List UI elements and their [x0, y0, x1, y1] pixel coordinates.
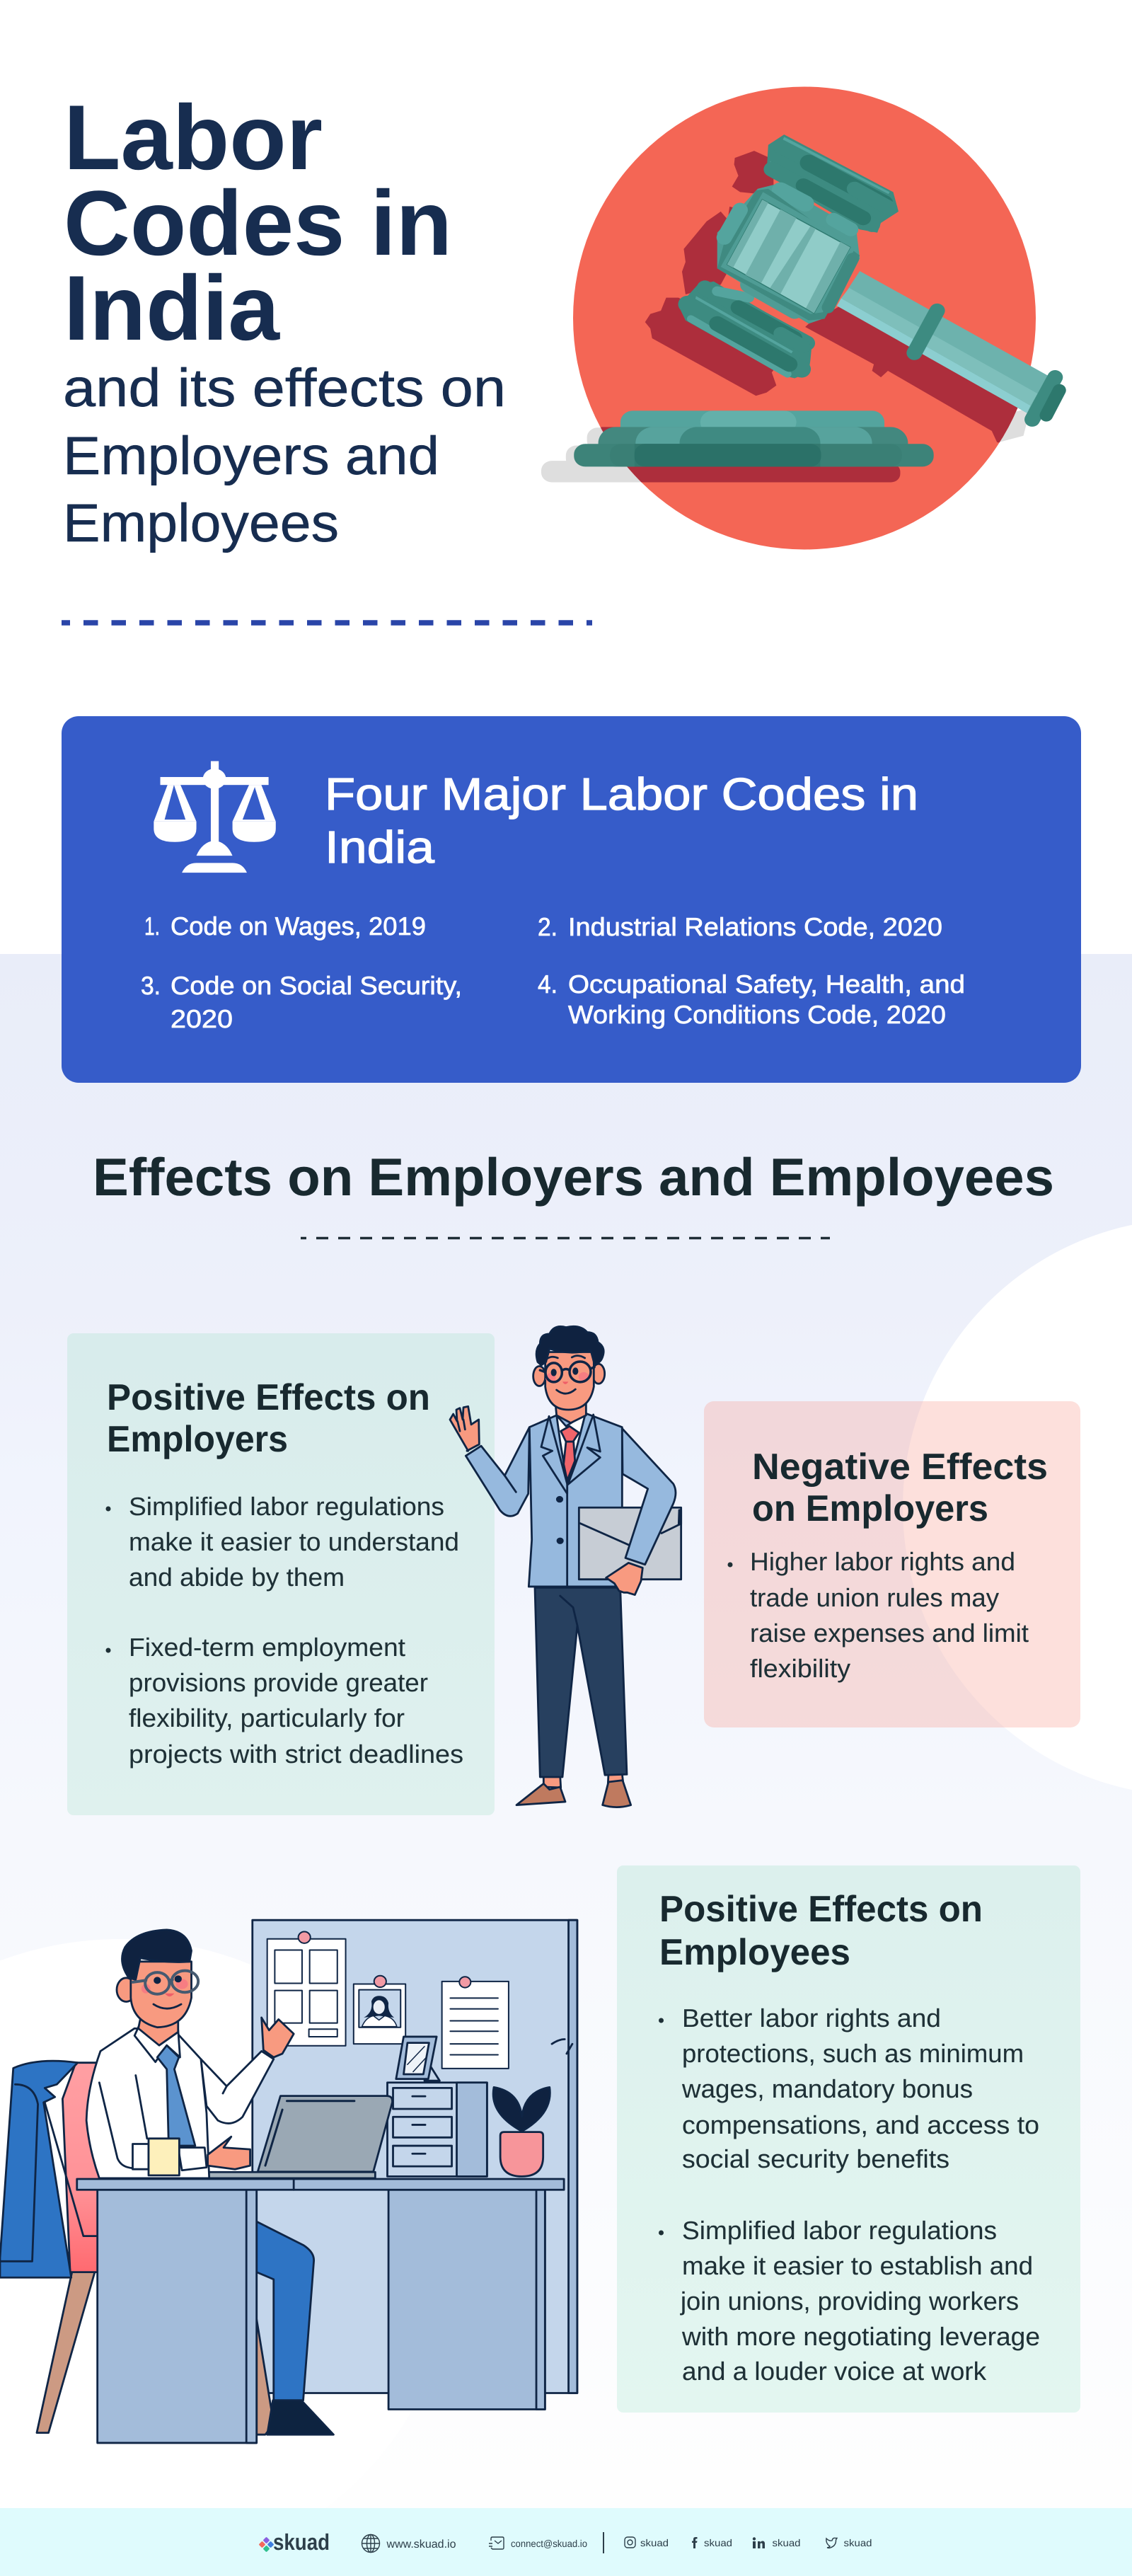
envelope — [579, 1507, 681, 1580]
photo frame — [396, 2037, 439, 2081]
twitter: skuad — [843, 2537, 872, 2548]
bullet: better labor rights: Better labor rights and — [682, 2003, 941, 2032]
grey shadow — [541, 408, 1030, 482]
gavel handle — [837, 271, 1048, 413]
heading — [659, 1889, 983, 1973]
website — [362, 2535, 456, 2552]
bullet: fixed-term employment: flexibility, particularly for — [129, 1703, 405, 1732]
list of codes: 2020 — [171, 1004, 233, 1033]
list of codes: Industrial Relations Code, 2020 — [568, 912, 942, 941]
pinned photo — [354, 1976, 405, 2044]
bullet: better labor rights — [659, 2003, 1039, 2173]
bullet: simplified regulations: make it easier to establish and — [682, 2251, 1033, 2280]
icon: scales of justice — [154, 761, 276, 873]
bullet: simplified regulations: and a louder voice at work — [682, 2357, 987, 2386]
heading: Positive Effects on — [107, 1377, 430, 1418]
list of codes: 1. — [144, 912, 160, 941]
legs and shoes — [516, 1587, 631, 1807]
heading — [107, 1377, 430, 1460]
cubicle wall — [253, 1920, 577, 2393]
bullet: simplified regulations: Simplified labor regulations — [129, 1492, 444, 1521]
head — [117, 1930, 198, 2045]
background panel — [0, 954, 1132, 2576]
footer — [0, 2508, 1132, 2576]
subtitle: and its effects on — [63, 358, 506, 418]
twitter — [826, 2537, 872, 2548]
illustration: gavel on red circle — [541, 86, 1059, 549]
section heading: Effects on Employers and Employees — [93, 1147, 1054, 1207]
glasses and face — [547, 1356, 585, 1359]
sound block — [620, 410, 884, 440]
heading: Employees — [659, 1932, 850, 1973]
heading: Four Major Labor Codes in — [325, 769, 918, 820]
chair — [37, 2063, 99, 2433]
heading: India — [325, 822, 434, 873]
list of codes: 4. — [538, 970, 558, 999]
heading: Employers — [107, 1419, 288, 1460]
linkedin — [753, 2537, 801, 2548]
list of codes: Working Conditions Code, 2020 — [568, 1000, 946, 1029]
laptop — [209, 2096, 393, 2178]
heading — [752, 1447, 1048, 1529]
bullet: simplified regulations: join unions, providing workers — [680, 2287, 1019, 2316]
bullet: better labor rights: social security benefits — [682, 2144, 949, 2173]
shirt and tie — [541, 1414, 600, 1494]
panel: positive effects on employers — [67, 1333, 495, 1815]
heading: Negative Effects — [752, 1447, 1048, 1488]
man torso and arm — [86, 2025, 274, 2178]
list of codes: 2. — [538, 912, 558, 941]
jacket on chair — [0, 2061, 78, 2277]
title — [64, 86, 452, 360]
bullet: simplified regulations: and abide by them — [129, 1563, 345, 1592]
hands — [208, 2018, 294, 2169]
bullet: better labor rights: wages, mandatory bonus — [681, 2074, 973, 2103]
facebook — [692, 2537, 732, 2548]
far leg and shoe — [257, 2221, 333, 2434]
bullet: higher labor rights: Higher labor rights and — [750, 1547, 1015, 1576]
list of codes: 3. — [141, 971, 161, 1000]
jacket — [466, 1413, 622, 1587]
mug and sleeve — [132, 2139, 207, 2175]
head — [533, 1326, 605, 1423]
pinned grid paper — [267, 1931, 346, 2046]
pinned note — [442, 1977, 509, 2069]
title: Labor — [64, 86, 323, 189]
bullet: simplified regulations: with more negotiating leverage — [681, 2322, 1040, 2351]
bullet: higher labor rights: raise expenses and limit — [750, 1618, 1029, 1648]
red circle — [573, 86, 1036, 549]
illustration: standing businessman with envelope — [450, 1326, 681, 1807]
heading: on Employers — [752, 1488, 988, 1529]
right arm and hand — [606, 1429, 676, 1595]
bullet: better labor rights: compensations, and access to — [682, 2110, 1039, 2139]
panel: positive effects on employees — [617, 1865, 1080, 2413]
linkedin: skuad — [773, 2537, 801, 2548]
email: connect@skuad.io — [511, 2538, 587, 2549]
bullet: fixed-term employment: provisions provide greater — [129, 1668, 428, 1697]
instagram: skuad — [640, 2537, 669, 2548]
gavel head — [717, 184, 860, 323]
bullet: simplified regulations — [106, 1492, 459, 1592]
website: www.skuad.io — [386, 2538, 456, 2551]
bullet: better labor rights: protections, such as minimum — [682, 2039, 1024, 2068]
subtitle: Employers and — [63, 426, 439, 486]
illustration: man at office desk — [0, 1920, 577, 2443]
bullet: fixed-term employment: projects with strict deadlines — [129, 1740, 463, 1769]
hair — [536, 1326, 603, 1365]
heading — [325, 769, 918, 873]
bullet: fixed-term employment — [106, 1633, 463, 1769]
bullet: higher labor rights — [727, 1547, 1029, 1683]
facebook: skuad — [704, 2537, 732, 2548]
logo: skuad — [273, 2529, 330, 2555]
list of codes — [141, 912, 965, 1033]
list of codes: Occupational Safety, Health, and — [568, 970, 965, 999]
bullet: simplified regulations: Simplified labor regulations — [682, 2216, 997, 2245]
bullet: higher labor rights: trade union rules may — [750, 1583, 999, 1612]
bullet: simplified regulations: make it easier to understand — [129, 1527, 459, 1556]
subtitle: Employees — [63, 493, 339, 553]
list of codes: Code on Social Security, — [171, 971, 462, 1000]
email — [489, 2537, 587, 2549]
gavel shadow — [601, 151, 1030, 482]
subtitle — [63, 358, 506, 553]
raised hand — [450, 1406, 479, 1451]
list of codes: Code on Wages, 2019 — [171, 912, 426, 941]
bullet: fixed-term employment: Fixed-term employment — [129, 1633, 405, 1662]
instagram — [625, 2537, 669, 2548]
title: India — [64, 256, 281, 360]
bullet: higher labor rights: flexibility — [750, 1654, 850, 1683]
file cabinet — [387, 2083, 487, 2176]
heading: Positive Effects on — [659, 1889, 983, 1930]
panel: four major labor codes — [62, 716, 1081, 1083]
bullet: simplified regulations — [659, 2216, 1040, 2386]
title: Codes in — [64, 171, 452, 275]
plant — [493, 2087, 550, 2176]
desk — [77, 2179, 564, 2443]
panel: negative effects on employers — [704, 1401, 1080, 1727]
